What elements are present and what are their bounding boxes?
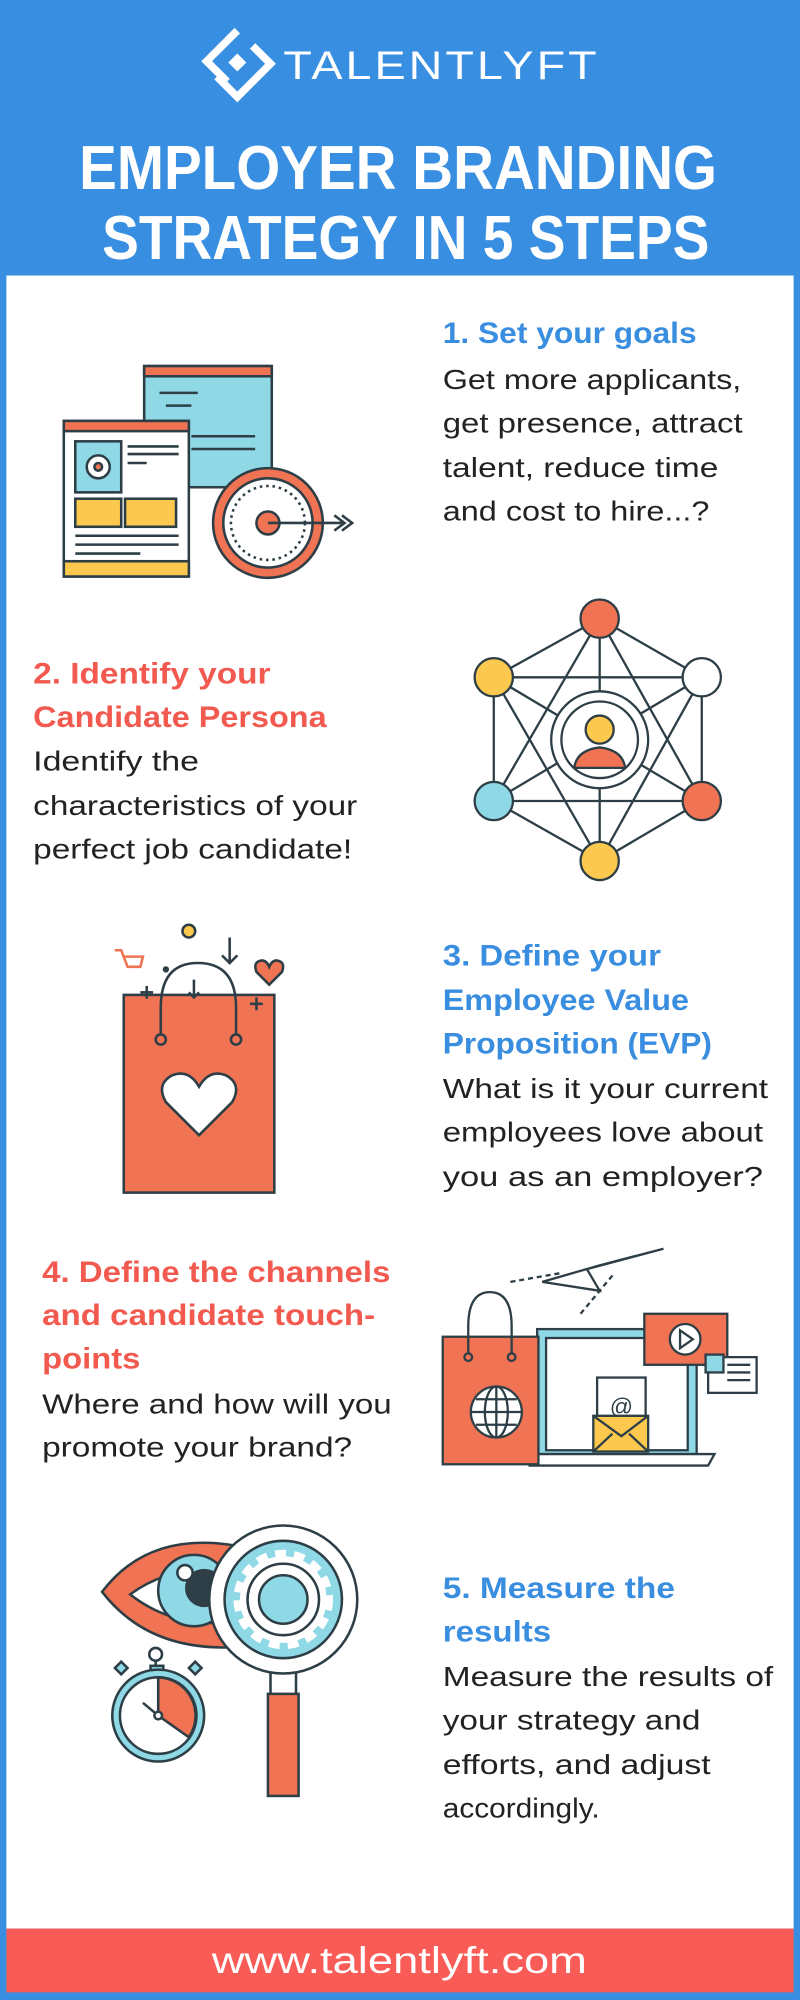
header [79,31,717,273]
icon: channels (bag, laptop, email, video) [443,1249,757,1466]
step 4 text: Where and how will you [42,1388,392,1419]
icon: eye, magnifier, stopwatch [102,1526,357,1796]
step 2 text: Identify the [33,745,199,776]
step 2 text [33,658,357,864]
title: EMPLOYER BRANDING [79,133,717,203]
step 1 text: get presence, attract [443,407,743,438]
step 5 text: efforts, and adjust [443,1749,711,1780]
step 5 text: accordingly. [443,1793,600,1824]
step 2 text: perfect job candidate! [33,833,352,864]
step 4 text: and candidate touch- [42,1299,375,1332]
step 4 text [42,1256,392,1463]
step 1 text: and cost to hire...? [443,495,709,526]
icon: documents and target [64,366,352,578]
step 3 text: Proposition (EVP) [443,1028,712,1061]
step 1 text [443,317,743,526]
step 5 text: your strategy and [443,1705,700,1736]
step 3 text: Employee Value [443,984,689,1017]
step 2 text: Candidate Persona [33,701,327,734]
step 3 text: 3. Define your [443,940,661,973]
step 4 text: 4. Define the channels [42,1256,390,1289]
icon: talentlyft logo [207,31,270,97]
icon: candidate network [475,599,721,880]
step 4 text: promote your brand? [42,1432,352,1463]
step 5 text: results [443,1616,551,1649]
logo text: TALENTLYFT [283,44,600,88]
footer: www.talentlyft.com [211,1940,587,1981]
step 1 text: talent, reduce time [443,452,718,483]
icon: channels (bag, laptop, email, video): @ [610,1394,633,1420]
step 2 text: characteristics of your [33,790,357,821]
step 4 text: points [42,1343,140,1376]
step 5 text: Measure the results of [443,1661,773,1692]
step 3 text [443,940,768,1192]
title: STRATEGY IN 5 STEPS [102,203,709,273]
step 2 text: 2. Identify your [33,658,270,691]
step 1 text: 1. Set your goals [443,317,697,350]
step 1 text: Get more applicants, [443,364,741,395]
icon: shopping bag with heart [115,925,283,1193]
footer [6,1929,794,1992]
step 3 text: What is it your current [443,1073,768,1104]
step 5 text [443,1572,773,1824]
step 5 text: 5. Measure the [443,1572,675,1605]
step 3 text: you as an employer? [443,1161,763,1192]
title [79,133,717,273]
step 3 text: employees love about [443,1117,763,1148]
